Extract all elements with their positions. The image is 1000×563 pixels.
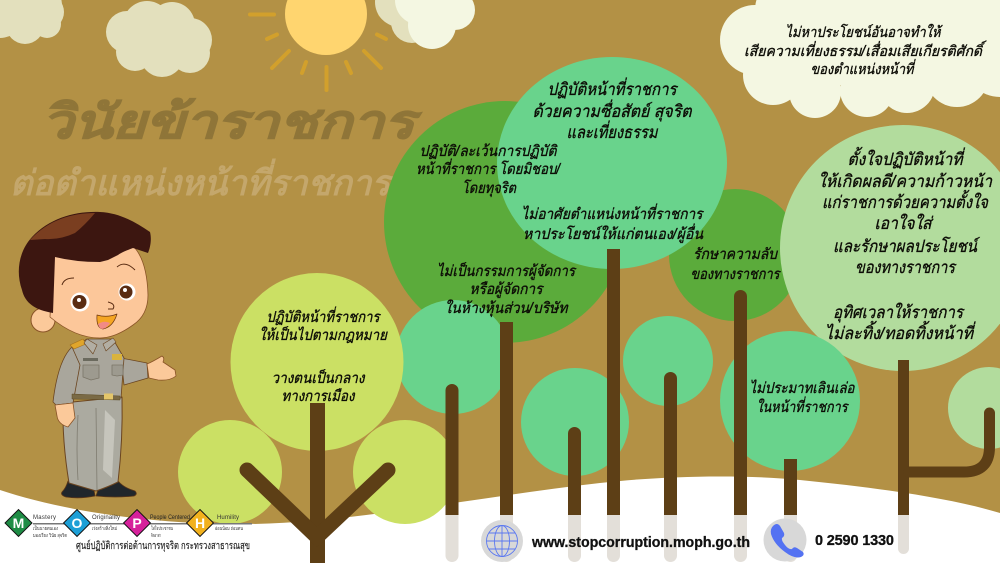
belt — [72, 394, 120, 400]
collar — [84, 338, 116, 354]
text: canopy top centre: ปฏิบัติหน้าที่ราชการ — [548, 77, 678, 99]
hair — [19, 212, 151, 313]
text: lime canopy: ให้เป็นไปตามกฎหมาย — [259, 326, 388, 344]
P diamond — [124, 510, 150, 536]
subtitle: ต่อตำแหน่งหน้าที่ราชการ — [10, 158, 395, 203]
M diamond — [5, 510, 32, 536]
text: right canopy: ไม่ละทิ้ง/ทอดทิ้งหน้าที่ — [825, 320, 976, 343]
brows and nose — [62, 264, 135, 309]
text: not abusing position — [522, 203, 704, 243]
phone number: 0 2590 1330 — [815, 533, 894, 549]
text: dark canopy: หน้าที่ราชการ โดยมิชอบ/ — [416, 158, 562, 178]
text: not abusing position: ไม่อาศัยตำแหน่งหน้าที่ราชการ — [522, 203, 704, 223]
text: canopy top centre: ด้วยความซื่อสัตย์ สุจริต — [532, 99, 692, 122]
text: canopy top centre: และเที่ยงธรรม — [566, 120, 658, 142]
cloud: top left — [0, 0, 64, 44]
logo: MOPH values: Humility — [217, 515, 239, 521]
logo: MOPH values: เป็นนายตนเอง — [33, 524, 58, 532]
title: วินัยข้าราชการ — [42, 95, 423, 148]
logo: MOPH values: อ่อนน้อม ถ่อมตน — [215, 525, 243, 532]
ground: white hill — [0, 476, 1000, 563]
O diamond: O — [72, 515, 83, 531]
logo: MOPH values — [5, 510, 252, 539]
O diamond — [64, 510, 90, 536]
left hand — [55, 403, 75, 427]
cloud: top right with text: เสียความเที่ยงธรรม/เสื่อมเสียเกียรติศักดิ์ — [744, 40, 988, 60]
M diamond: M — [13, 515, 24, 531]
right hand — [147, 356, 176, 380]
text: right canopy: ให้เกิดผลดี/ความก้าวหน้า — [818, 171, 992, 191]
logo: MOPH values: Mastery — [33, 515, 56, 521]
tree trunks — [247, 249, 990, 563]
cloud: top centre — [106, 1, 212, 77]
text: not company director — [437, 262, 577, 317]
torso — [70, 339, 124, 398]
text: keeping secrets: รักษาความลับ — [693, 246, 778, 263]
text: not negligent: ไม่ประมาทเลินเล่อ — [750, 379, 855, 397]
cloud: top right with text: ของตำแหน่งหน้าที่ — [810, 59, 916, 78]
text: not company director: ไม่เป็นกรรมการผู้จัดการ — [437, 262, 577, 280]
text: right canopy: ของทางราชการ — [855, 258, 957, 277]
logo: MOPH values: จิตอาสา — [151, 532, 161, 539]
shoes — [62, 481, 136, 498]
ear — [31, 308, 55, 332]
website url: www.stopcorruption.moph.go.th — [531, 535, 750, 551]
text: dark canopy — [416, 143, 562, 197]
text: lime canopy: วางตนเป็นกลาง — [272, 369, 366, 387]
text: not negligent — [750, 379, 855, 416]
character: civil servant boy — [19, 212, 176, 498]
logo: MOPH values: ใส่ใจประชาชน — [151, 525, 173, 532]
text: dark canopy: ปฏิบัติ/ละเว้นการปฏิบัติ — [420, 143, 558, 160]
cloud: top right with text: ไม่หาประโยชน์อันอาจทำให้ — [786, 23, 943, 41]
mouth — [97, 314, 117, 329]
text: lime canopy — [259, 306, 388, 405]
logo: MOPH values: Originality — [92, 515, 120, 521]
left sleeve — [53, 347, 80, 405]
text: right canopy: ตั้งใจปฏิบัติหน้าที่ — [848, 146, 965, 169]
tree canopies — [178, 57, 1000, 524]
text: not company director: ในห้างหุ้นส่วน/บริษัท — [444, 299, 569, 317]
text: right canopy: เอาใจใส่ — [874, 213, 934, 233]
epaulette — [70, 339, 86, 349]
icon: phone — [764, 518, 806, 562]
text: right canopy: อุทิศเวลาให้ราชการ — [833, 302, 965, 323]
P diamond: P — [132, 515, 142, 531]
H diamond: H — [195, 515, 205, 531]
H diamond — [187, 510, 213, 536]
text: lime canopy: ทางการเมือง — [282, 388, 356, 405]
logo: MOPH values: People Centered — [150, 515, 190, 521]
text: keeping secrets: ของทางราชการ — [690, 266, 781, 283]
text: lime canopy: ปฏิบัติหน้าที่ราชการ — [266, 306, 381, 326]
cloud: top right with text — [720, 0, 1000, 118]
icon: sun — [250, 0, 403, 90]
text: not negligent: ในหน้าที่ราชการ — [756, 396, 849, 416]
text: canopy top centre — [532, 77, 692, 142]
cloud: behind top right — [375, 0, 475, 49]
text: right canopy: และรักษาผลประโยชน์ — [833, 236, 981, 256]
footer organisation name: ศูนย์ปฏิบัติการต่อต้านการทุจริต กระทรวงสาธารณสุข — [76, 539, 250, 552]
eyes — [70, 292, 90, 312]
trousers — [63, 397, 122, 491]
text: not company director: หรือผู้จัดการ — [470, 281, 544, 298]
text: not abusing position: หาประโยชน์ให้แก่ตนเอง/ผู้อื่น — [523, 223, 704, 243]
face — [50, 246, 148, 338]
shirt details — [83, 365, 99, 380]
right sleeve — [121, 358, 148, 385]
text: dark canopy: โดยทุจริต — [462, 179, 517, 197]
icon: globe — [481, 520, 523, 562]
logo: MOPH values: มองเรียง วินัย สุจริต — [33, 532, 67, 539]
text: keeping secrets — [690, 246, 781, 283]
text: right canopy — [818, 146, 992, 343]
logo: MOPH values: เร่งสร้างสิ่งใหม่ — [92, 525, 117, 532]
